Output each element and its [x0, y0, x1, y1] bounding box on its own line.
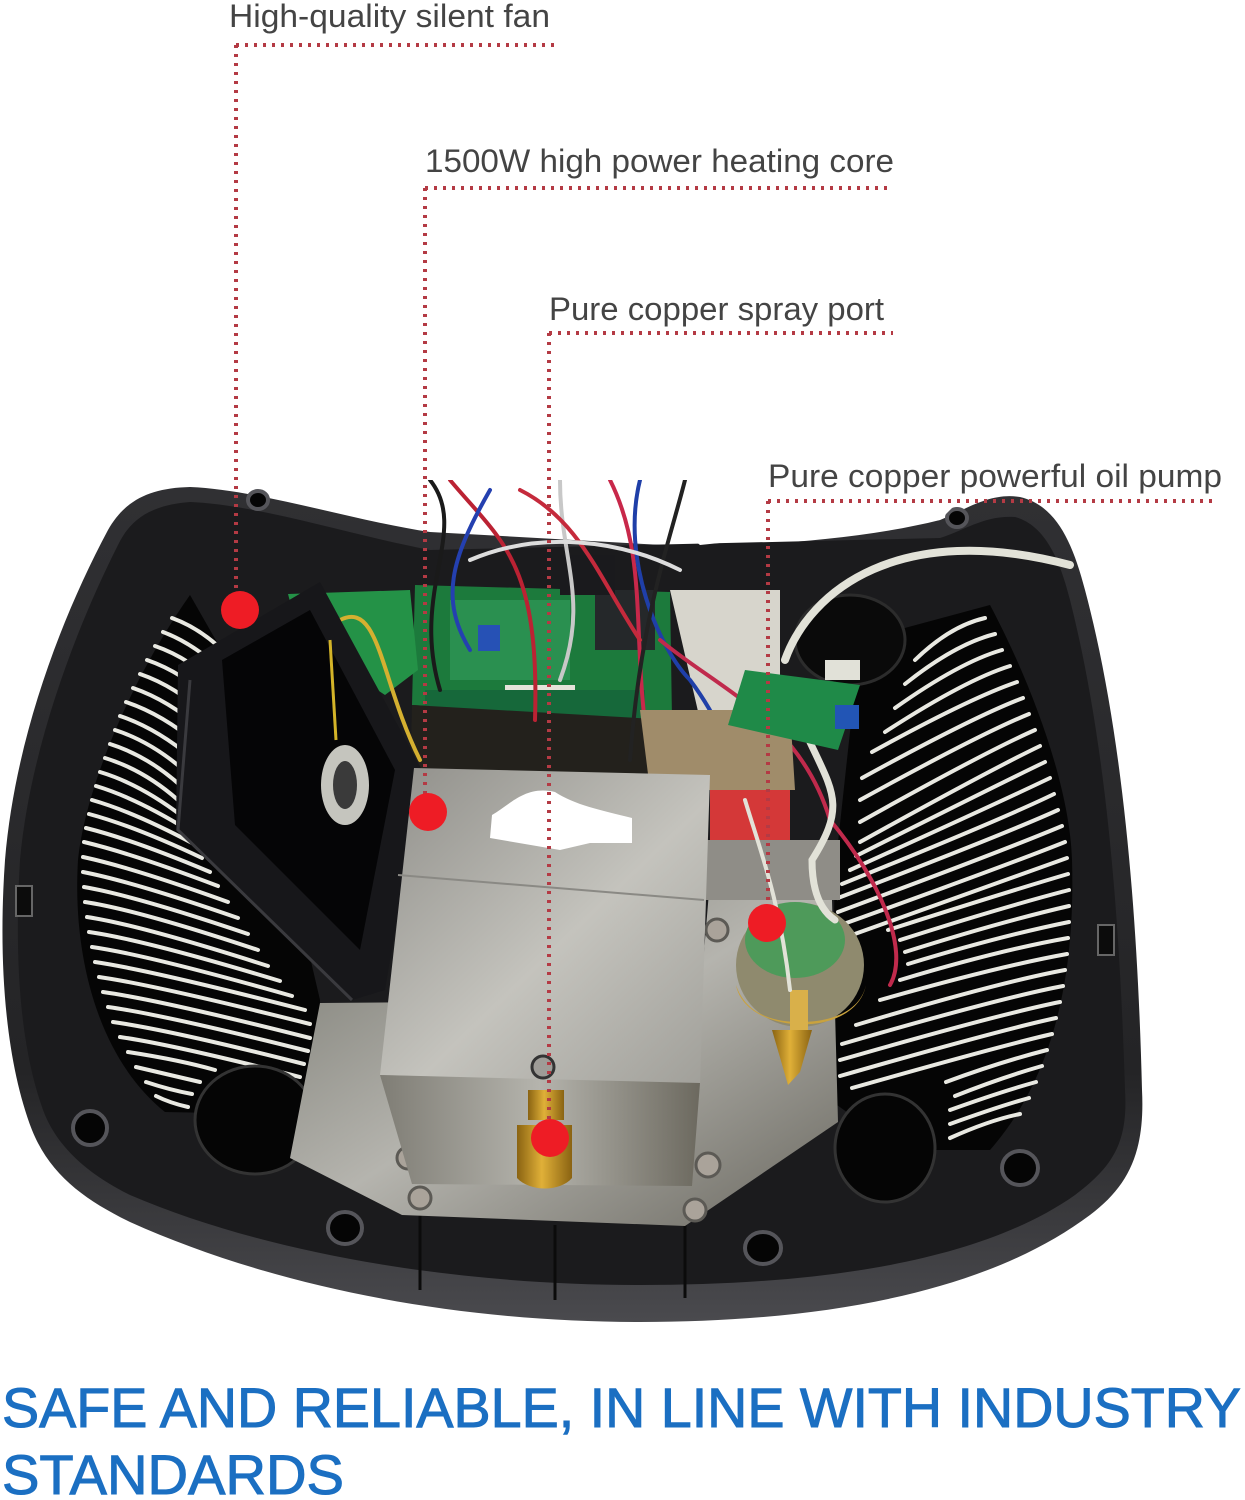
air vents: [195, 595, 935, 1202]
control circuit board: [410, 555, 672, 790]
mounting holes: [73, 491, 1038, 1264]
heater housing: [2, 487, 1142, 1322]
callout: spray port: [531, 291, 893, 1157]
brass spray nozzle: [517, 1090, 572, 1188]
wires: [340, 480, 896, 985]
box screw: [532, 1056, 554, 1078]
callout: high-quality silent fan: [221, 0, 557, 629]
transformer: [640, 710, 840, 900]
oil pump tube: [745, 551, 1070, 990]
heating core box: [380, 768, 710, 1186]
headline: SAFE AND RELIABLE, IN LINE WITH INDUSTRY: [2, 1376, 1241, 1439]
plate screws: [397, 919, 728, 1221]
callout: oil pump: Pure copper powerful oil pump: [768, 458, 1222, 494]
white background cutoff above wires: [400, 440, 760, 480]
white connector: [620, 480, 960, 545]
callout: oil pump: [748, 458, 1222, 942]
cooling fan: [176, 582, 422, 1000]
callout: spray port: Pure copper spray port: [549, 291, 884, 327]
left vent grille: [77, 595, 320, 1115]
pump circuit board: [728, 660, 860, 750]
callout: heating core: [409, 143, 894, 831]
mounting plate: [290, 880, 838, 1226]
callout: heating core: 1500W high power heating core: [425, 143, 894, 179]
headline: [2, 1376, 1241, 1500]
oil pump: [736, 902, 866, 1085]
right vent grille: [830, 605, 1072, 1150]
wire bundle background plate: [670, 590, 780, 720]
small fan circuit board: [288, 590, 418, 695]
